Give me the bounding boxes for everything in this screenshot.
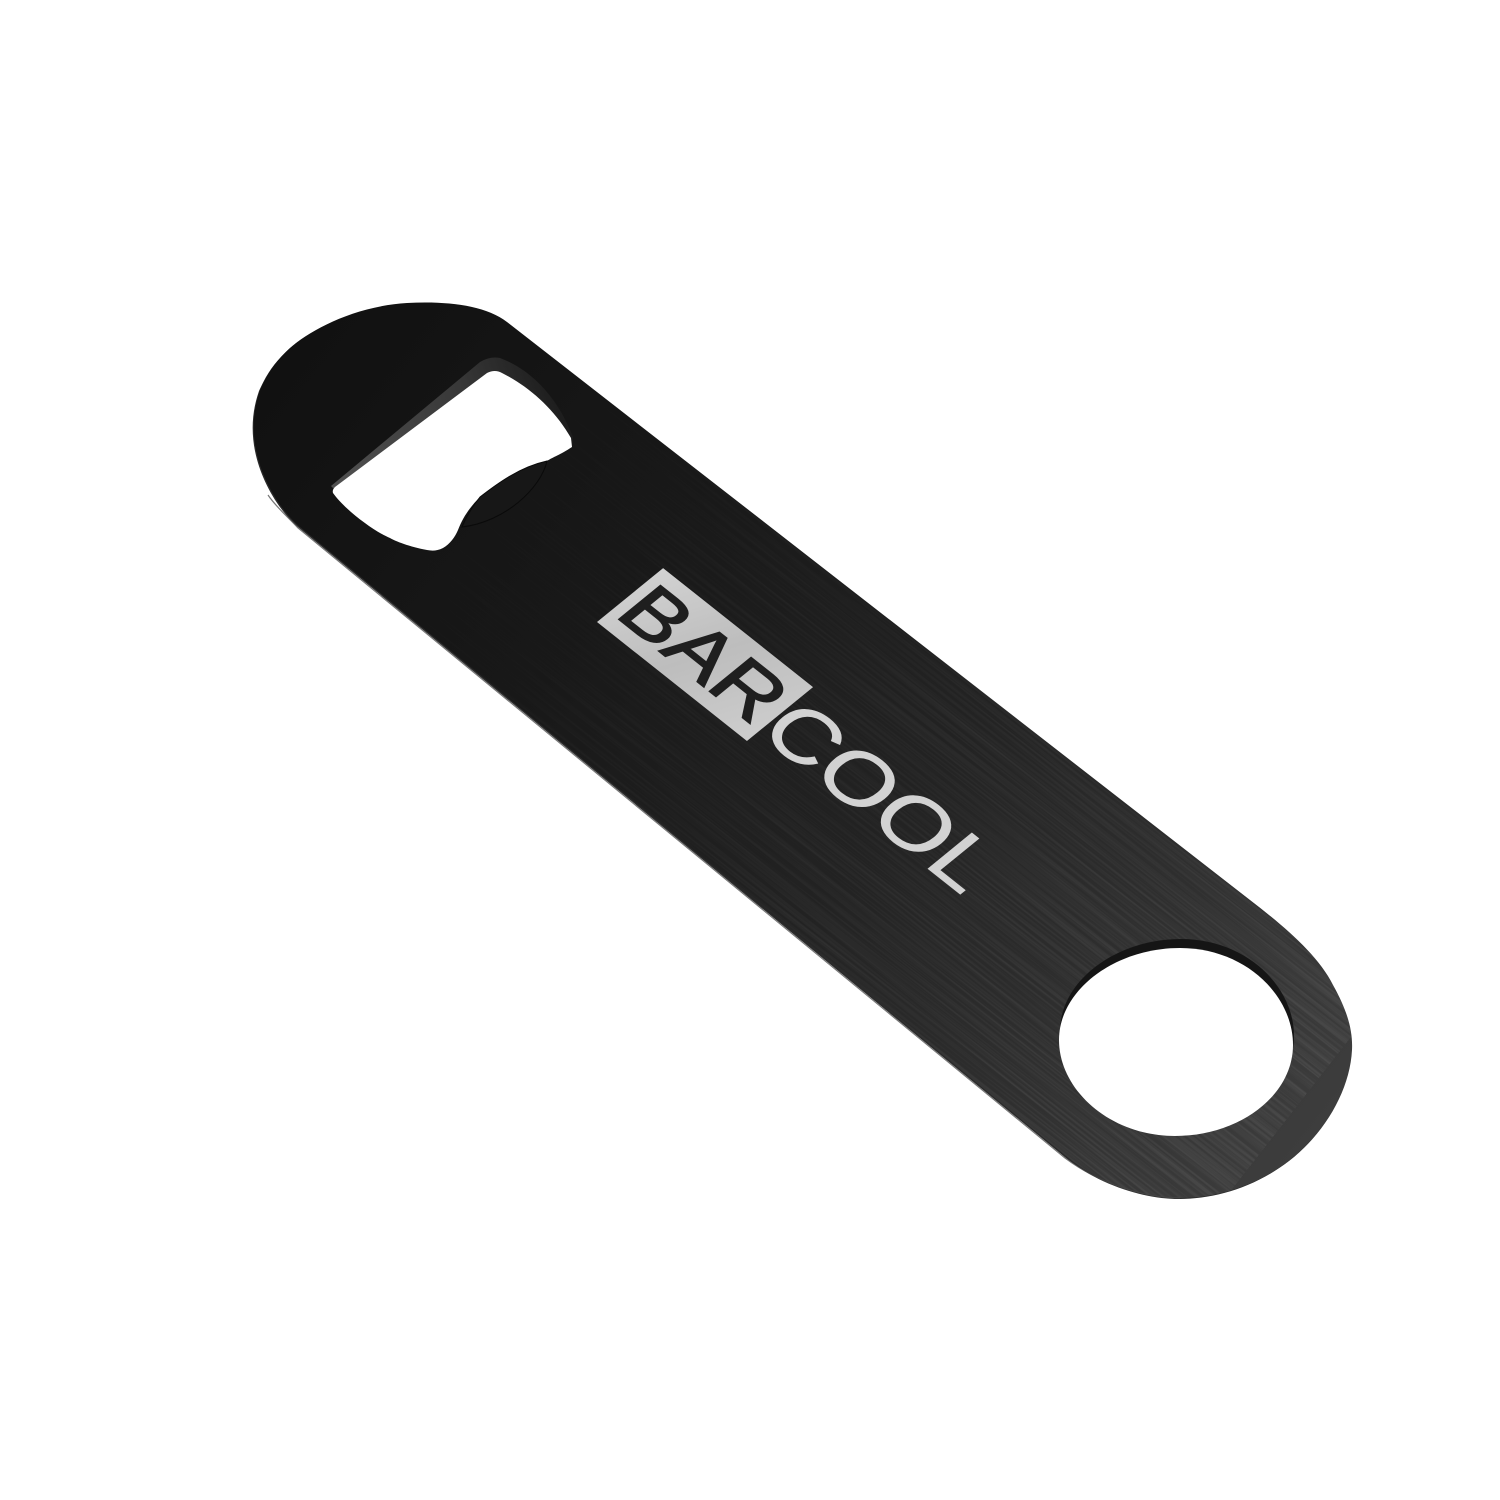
inner wall of round opening [1060, 939, 1294, 1127]
blade edge thickness [253, 304, 1351, 1199]
logo plate [597, 568, 813, 741]
opener: metal blade [252, 302, 1352, 1199]
bent lifter tab [462, 461, 547, 527]
logo word: COOL: COOL [743, 687, 1019, 907]
blade face [254, 303, 1352, 1198]
logo word: BAR: BAR [600, 570, 808, 737]
inner wall of opening [331, 358, 573, 500]
cap lifter opening [331, 358, 573, 551]
round cap opening [1059, 939, 1294, 1136]
logo: BARCOOL [593, 567, 1020, 907]
opening cut-out [333, 371, 572, 551]
lower edge highlight [268, 495, 1180, 1198]
product illustration: BARCOOL bar blade bottle opener [252, 302, 1352, 1199]
round cut-out [1059, 948, 1293, 1136]
brushed metal texture [760, 689, 1350, 1198]
